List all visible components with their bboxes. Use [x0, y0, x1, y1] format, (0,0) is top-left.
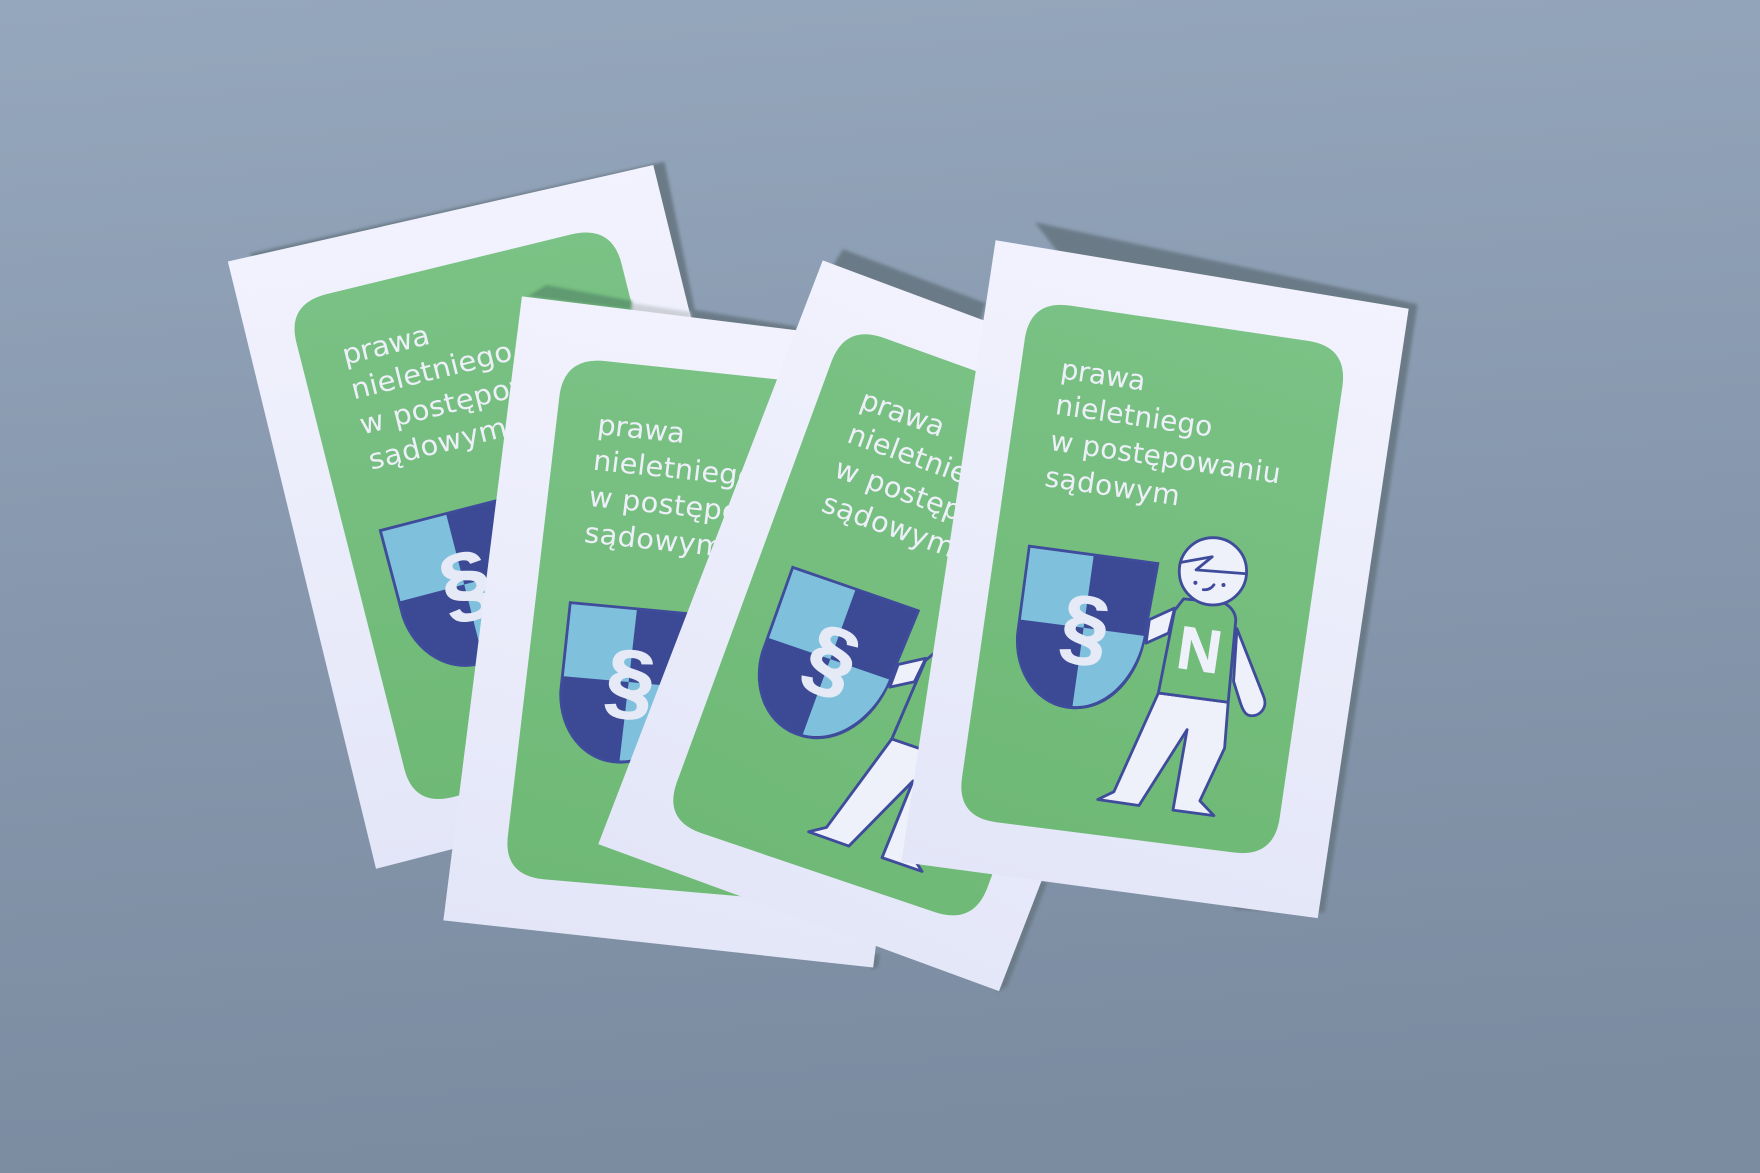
title text: prawa — [856, 382, 950, 444]
title text: w postępowaniu — [356, 351, 599, 441]
title text: w postępowaniu — [587, 480, 829, 537]
booklet 4: front right, complete cover — [901, 240, 1409, 918]
green panel — [493, 350, 903, 911]
booklet 3: angled, third from left — [584, 242, 1238, 1010]
shield with paragraph sign — [369, 481, 567, 684]
shield with paragraph sign: § — [600, 632, 660, 731]
shield with paragraph sign: § — [430, 531, 501, 635]
title text: nieletniego — [591, 444, 757, 493]
cover paper — [425, 281, 968, 983]
boy figure holding shield: N — [1173, 613, 1226, 686]
title text: nieletniego — [1053, 388, 1215, 444]
boy figure partly hidden — [805, 633, 982, 874]
shadow of booklet 2 falling on booklet 1 — [528, 285, 690, 320]
shield with paragraph sign: § — [1055, 577, 1115, 678]
title text: sądowym — [1043, 460, 1182, 513]
green panel — [961, 305, 1343, 853]
title text: w postępowaniu — [1048, 424, 1283, 490]
booklet 1: back left — [137, 102, 888, 920]
title text: sądowym — [583, 517, 726, 563]
shield with paragraph sign: § — [793, 605, 872, 712]
title text: prawa — [339, 318, 433, 371]
title text — [1043, 353, 1293, 526]
cover artwork — [660, 315, 1158, 935]
green panel — [222, 188, 802, 839]
shield with paragraph sign — [747, 565, 922, 754]
title text: w postępowaniu — [830, 451, 1066, 563]
title text: sądowym — [365, 410, 510, 476]
title text: nieletniego — [843, 416, 1008, 503]
green panel — [660, 315, 1158, 935]
title text — [339, 281, 608, 476]
shadows cast by the booklets — [249, 162, 1418, 992]
cover paper — [584, 242, 1238, 1010]
booklet 2: second from left — [425, 281, 968, 983]
cover artwork — [222, 188, 802, 839]
title text — [818, 382, 1092, 598]
title text: prawa — [596, 409, 687, 450]
cover paper — [901, 240, 1409, 918]
title text: prawa — [1059, 353, 1148, 398]
shield with paragraph sign — [558, 598, 708, 764]
shield with paragraph sign — [1017, 546, 1158, 708]
title text: nieletniego — [347, 334, 515, 406]
boy figure holding shield — [1098, 538, 1265, 816]
cover artwork — [493, 350, 903, 911]
cover paper — [137, 102, 888, 920]
title text: sądowym — [818, 486, 960, 564]
title text — [583, 409, 837, 574]
